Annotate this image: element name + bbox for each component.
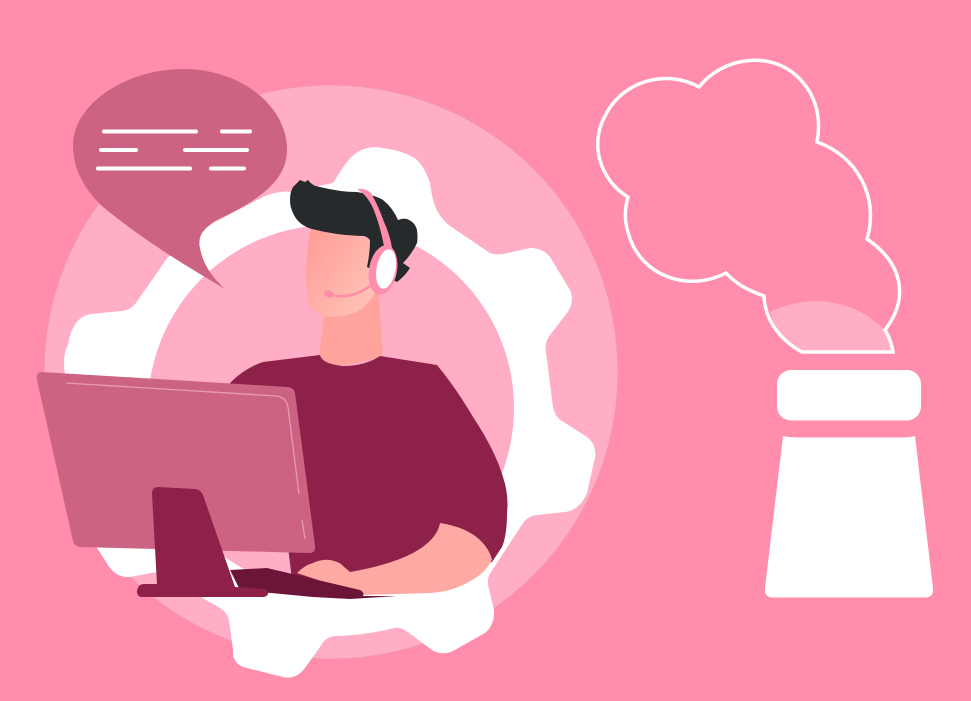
background circle	[44, 85, 618, 659]
headset	[323, 189, 401, 299]
hair	[290, 180, 418, 282]
chimney cap	[777, 370, 921, 420]
smoke cloud	[598, 60, 900, 352]
chimney body	[765, 436, 933, 598]
arm and hand	[297, 523, 492, 595]
keyboard	[230, 568, 397, 599]
monitor	[37, 372, 315, 553]
speech bubble	[73, 69, 287, 289]
chimney	[765, 370, 933, 598]
shirt	[230, 355, 508, 580]
face	[306, 225, 378, 317]
operator	[230, 180, 508, 595]
gear	[64, 147, 595, 678]
speech bubble text lines	[98, 132, 250, 168]
neck	[319, 285, 382, 365]
monitor stand	[137, 487, 268, 597]
